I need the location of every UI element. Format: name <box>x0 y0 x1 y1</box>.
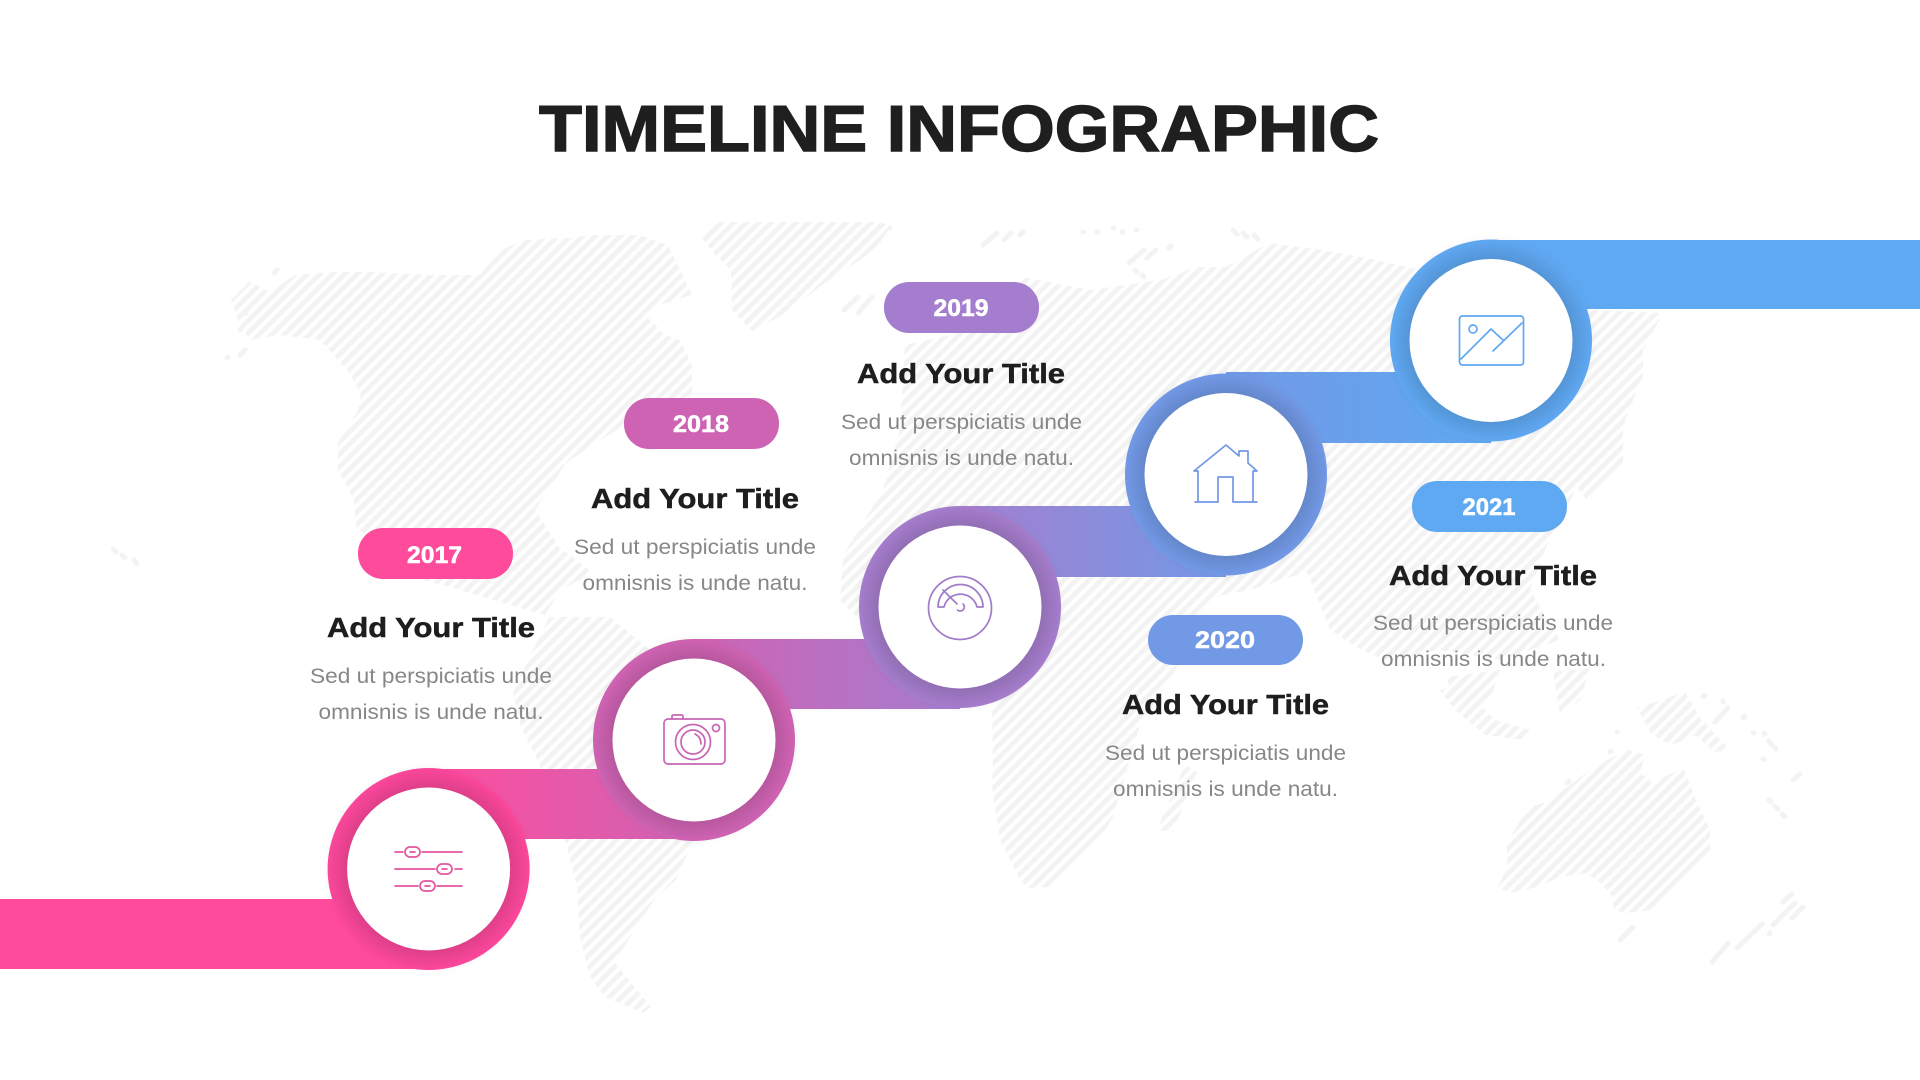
description 2017: omnisnis is unde natu. <box>318 701 544 724</box>
map: Indonesia <box>1440 685 1530 740</box>
icon: house <box>1194 445 1257 502</box>
map: Madagascar <box>1157 765 1197 832</box>
map: Australia <box>1498 750 1710 913</box>
description 2019: omnisnis is unde natu. <box>849 447 1074 470</box>
year pill 2018: 2018 <box>673 411 729 438</box>
node 2018: camera icon <box>593 639 795 841</box>
year pill 2020 <box>1148 615 1303 665</box>
description 2020: Sed ut perspiciatis unde <box>1105 742 1346 765</box>
icon: gauge <box>928 576 992 640</box>
description 2018 <box>574 536 816 595</box>
icon: camera <box>664 715 725 764</box>
description 2019: Sed ut perspiciatis unde <box>841 411 1082 434</box>
description 2017 <box>310 665 552 724</box>
map: small islands <box>113 228 1803 962</box>
map: Eurasia and Africa <box>840 243 1663 888</box>
heading 2020: Add Your Title <box>1122 689 1329 720</box>
description 2018: omnisnis is unde natu. <box>582 572 808 595</box>
bar: connector 2017 to 2018 <box>429 769 694 839</box>
node 2020: house icon <box>1125 374 1327 576</box>
year pill 2021: 2021 <box>1462 494 1516 521</box>
node 2017: sliders icon <box>328 768 530 970</box>
year pill 2017 <box>358 528 513 579</box>
year pill 2019 <box>884 282 1039 333</box>
heading 2021: Add Your Title <box>1389 560 1597 591</box>
bar: right exit <box>1491 240 1920 309</box>
year pill 2018 <box>624 398 779 449</box>
map: Greenland <box>700 222 892 332</box>
step 2018 text <box>574 398 816 595</box>
icon: sliders <box>395 847 462 891</box>
map: Borneo <box>1553 668 1590 715</box>
bar: connector 2018 to 2019 <box>694 639 960 709</box>
description 2020 <box>1105 742 1346 801</box>
icon: picture <box>1460 316 1524 365</box>
year pill 2021 <box>1412 481 1567 532</box>
description 2021: omnisnis is unde natu. <box>1381 648 1606 671</box>
node 2019: gauge icon <box>859 506 1061 708</box>
map: Southeast Asia <box>1447 670 1500 712</box>
map: South America <box>513 617 730 1013</box>
description 2018: Sed ut perspiciatis unde <box>574 536 816 559</box>
map: North and Central America <box>231 235 692 615</box>
heading 2019: Add Your Title <box>857 358 1065 389</box>
year pill 2017: 2017 <box>407 542 462 569</box>
timeline ribbon <box>0 240 1920 969</box>
step 2019 text <box>841 282 1082 470</box>
heading 2017: Add Your Title <box>327 612 535 643</box>
heading 2018: Add Your Title <box>591 483 799 514</box>
year pill 2019: 2019 <box>934 295 988 322</box>
bar: connector 2019 to 2020 <box>960 506 1226 577</box>
description 2020: omnisnis is unde natu. <box>1113 778 1338 801</box>
step 2020 text <box>1105 615 1346 801</box>
node 2021: picture icon <box>1390 240 1592 442</box>
step 2017 text <box>310 528 552 724</box>
description 2017: Sed ut perspiciatis unde <box>310 665 552 688</box>
description 2021: Sed ut perspiciatis unde <box>1373 612 1613 635</box>
step 2021 text <box>1373 481 1613 671</box>
bar: left entry <box>0 899 429 969</box>
map: New Guinea <box>1637 692 1730 752</box>
description 2019 <box>841 411 1082 470</box>
bar: connector 2020 to 2021 <box>1226 372 1491 443</box>
title: TIMELINE INFOGRAPHIC <box>539 92 1379 165</box>
year pill 2020: 2020 <box>1195 627 1255 654</box>
background: dotted world map <box>113 222 1803 1013</box>
description 2021 <box>1373 612 1613 671</box>
